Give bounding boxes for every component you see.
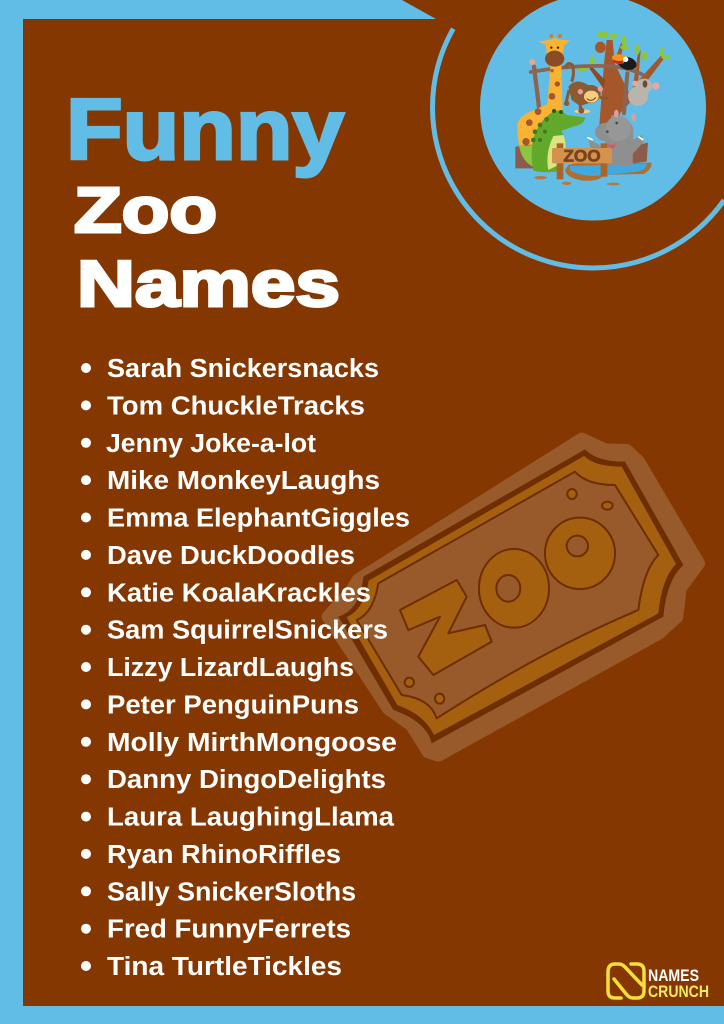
title word: Names: Names xyxy=(77,247,340,320)
names list xyxy=(81,355,410,981)
list item: Jenny Joke-a-lot xyxy=(106,430,317,458)
logo wordmark second line: CRUNCH xyxy=(648,982,709,1001)
wooden zoo sign: ZOO xyxy=(563,146,601,165)
list item: Sam SquirrelSnickers xyxy=(107,617,388,645)
ring arc around illustration xyxy=(432,29,724,268)
water pool xyxy=(565,162,652,181)
fence rail xyxy=(531,66,643,113)
logo mark xyxy=(608,964,644,998)
list item: Fred FunnyFerrets xyxy=(107,916,351,944)
list item: Tina TurtleTickles xyxy=(107,953,342,981)
ticket rivets xyxy=(405,489,613,704)
hippo xyxy=(587,110,644,165)
watermark: zoo ticket sign xyxy=(328,439,698,755)
toucan xyxy=(612,54,638,72)
list item: Laura LaughingLlama xyxy=(107,804,395,832)
list item: Mike MonkeyLaughs xyxy=(107,467,380,495)
list item: Peter PenguinPuns xyxy=(107,691,359,719)
list item: Sarah Snickersnacks xyxy=(107,355,379,383)
blue illustration circle xyxy=(480,0,706,220)
crocodile xyxy=(519,109,585,172)
ticket dark border xyxy=(338,449,683,743)
logo wordmark: NAMES xyxy=(648,966,699,985)
title word: Zoo: Zoo xyxy=(74,174,217,246)
list item: Danny DingoDelights xyxy=(107,766,386,794)
tree xyxy=(577,31,671,128)
list item: Ryan RhinoRiffles xyxy=(107,841,341,869)
icon: zoo animals illustration xyxy=(515,31,671,185)
list item: Tom ChuckleTracks xyxy=(107,392,365,420)
list item: Emma ElephantGiggles xyxy=(107,504,410,532)
list item: Molly MirthMongoose xyxy=(107,729,397,757)
list item: Katie KoalaKrackles xyxy=(107,579,371,607)
ground pebbles xyxy=(534,176,620,185)
wooden zoo sign xyxy=(552,143,612,179)
ticket inner panel xyxy=(357,472,658,718)
ticket letters Z O O xyxy=(400,518,615,675)
logo: Names Crunch xyxy=(608,964,709,1001)
title xyxy=(66,82,344,320)
list item: Lizzy LizardLaughs xyxy=(107,654,354,682)
list item: Dave DuckDoodles xyxy=(107,542,355,570)
ticket orange border xyxy=(347,456,676,735)
koala xyxy=(628,79,660,106)
trunk stump, left and right xyxy=(515,143,648,168)
title word: Funny: Funny xyxy=(66,82,344,178)
monkey xyxy=(564,63,608,114)
list item: Sally SnickerSloths xyxy=(107,878,356,906)
ticket halo xyxy=(328,439,698,755)
giraffe xyxy=(517,34,570,147)
